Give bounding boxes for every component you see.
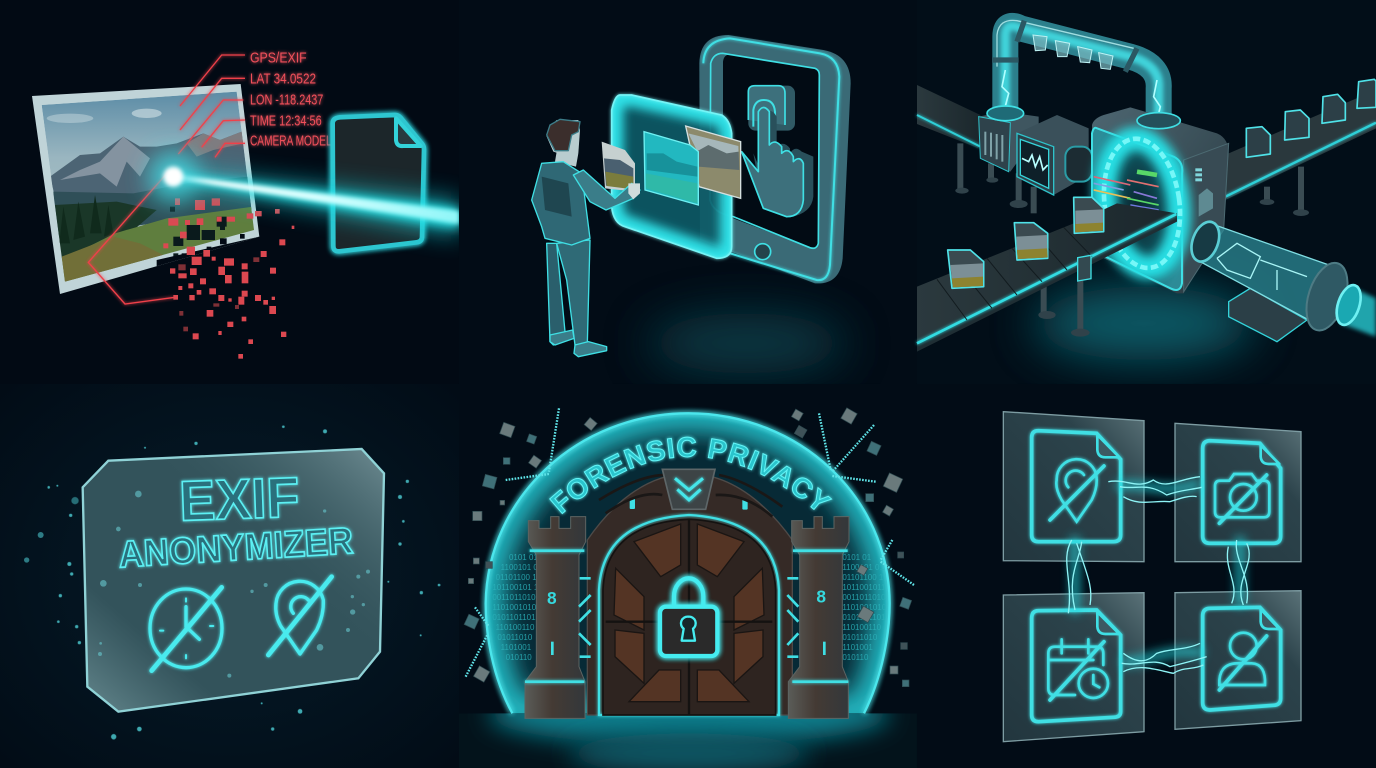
left tower: 8 bbox=[547, 588, 557, 608]
panel: user interacting with tablet bbox=[459, 34, 861, 384]
machine legs bbox=[960, 143, 1301, 333]
arched vault door bbox=[603, 519, 776, 715]
panel: forensic privacy fortress bbox=[459, 384, 916, 768]
dotted data rays with arrows bbox=[466, 408, 914, 677]
panel: metadata laser stripping bbox=[32, 50, 459, 359]
title arc: FORENSIC PRIVACY: FORENSIC PRIVACY bbox=[548, 434, 834, 516]
tile: location file bbox=[1003, 412, 1144, 562]
pressed button bbox=[748, 86, 795, 131]
damage squares in photo bbox=[170, 207, 227, 258]
lightning connectors bbox=[1067, 477, 1249, 673]
binary rain: 0101101101 bbox=[492, 613, 536, 622]
left tower bbox=[525, 517, 586, 718]
panel: EXIF anonymizer glass plate bbox=[0, 384, 459, 768]
tile: camera file bbox=[1175, 423, 1301, 562]
binary rain: 01101100 1 bbox=[496, 573, 537, 582]
binary rain: 010110 bbox=[842, 653, 869, 662]
right tower bbox=[788, 517, 849, 718]
binary rain: 01011010 bbox=[497, 633, 533, 642]
binary rain: 0101 01 bbox=[842, 553, 872, 562]
binary rain: 01011010 bbox=[842, 633, 878, 642]
binary rain: 1101001010 bbox=[842, 603, 887, 612]
panel: crossed metadata tiles bbox=[917, 384, 1376, 768]
floating particles bbox=[24, 425, 440, 739]
keystone with chevron bbox=[662, 469, 715, 509]
reflective floor bbox=[468, 713, 910, 768]
tile: person file bbox=[1175, 591, 1301, 729]
icon: padlock bbox=[660, 578, 717, 656]
red circuit lines and metadata labels: GPS/EXIF bbox=[250, 49, 307, 66]
binary rain: 01101100 1 bbox=[842, 573, 884, 582]
binary rain: 1011001011 bbox=[842, 583, 886, 592]
binary rain: 0011011010 bbox=[492, 593, 536, 602]
laser beam bbox=[148, 152, 459, 237]
red circuit lines and metadata labels: TIME 12:34:56 bbox=[250, 112, 322, 129]
icon: tablet with pointing hand bbox=[699, 35, 851, 283]
binary rain: 010110 bbox=[506, 653, 532, 662]
binary rain: 0101 01 bbox=[509, 553, 538, 562]
card: natural photo right bbox=[686, 126, 741, 198]
front conveyor bbox=[917, 203, 1177, 352]
binary rain: 0101101101 bbox=[842, 613, 886, 622]
title: EXIF ANONYMIZER: EXIF bbox=[178, 467, 300, 534]
red circuit lines and metadata labels: LAT 34.0522 bbox=[250, 71, 316, 88]
binary rain: 1100101 01 bbox=[501, 563, 543, 572]
binary rain: 110100110 bbox=[842, 623, 882, 632]
arched stone frame bbox=[587, 473, 792, 715]
figure: man in suit bbox=[532, 119, 640, 357]
icon: clock crossed out bbox=[150, 587, 222, 671]
red circuit lines and metadata labels bbox=[88, 49, 332, 304]
title: EXIF ANONYMIZER bbox=[117, 467, 354, 575]
binary rain: 1101001 bbox=[501, 643, 532, 652]
card: cyan filtered photo bbox=[644, 132, 698, 205]
binary rain: 110100110 bbox=[496, 623, 535, 632]
binary rain: 1101001 bbox=[842, 643, 873, 652]
binary rain: 1101001010 bbox=[492, 603, 537, 612]
binary rain: 1100101 01 bbox=[842, 563, 884, 572]
images and files on conveyor bbox=[948, 79, 1376, 288]
glass plate bbox=[83, 449, 384, 712]
binary rain: 0011011010 bbox=[842, 593, 886, 602]
hand bbox=[753, 111, 813, 217]
glass crystals in pipe bbox=[1033, 35, 1113, 69]
output tube bbox=[1186, 218, 1376, 342]
card: original file in hand bbox=[602, 142, 635, 192]
machine blocks bbox=[979, 106, 1092, 195]
binary rain bbox=[492, 553, 887, 662]
glowing glass panel with image cards bbox=[602, 95, 741, 258]
dome bbox=[486, 413, 890, 713]
debris cubes bbox=[464, 408, 912, 687]
back conveyors bbox=[917, 85, 1376, 200]
icon: location pin crossed out bbox=[268, 577, 332, 655]
right tower: 8 bbox=[816, 587, 826, 607]
main processor cube with portal bbox=[1092, 107, 1229, 293]
red circuit lines and metadata labels: LON -118.2437 bbox=[250, 92, 323, 109]
photo with mountain landscape bbox=[32, 84, 260, 297]
overhead pipe bbox=[992, 20, 1160, 120]
chevron vents bbox=[579, 578, 798, 657]
disintegrating red pixels bbox=[163, 198, 294, 359]
icon: clean document bbox=[333, 115, 424, 251]
title: EXIF ANONYMIZER: ANONYMIZER bbox=[117, 519, 354, 575]
red circuit lines and metadata labels: CAMERA MODEL bbox=[250, 133, 332, 150]
panel: conveyor sanitising pipeline bbox=[917, 0, 1376, 384]
binary rain: 101100101 1 bbox=[492, 583, 539, 592]
tile: calendar and clock file bbox=[1003, 593, 1144, 742]
